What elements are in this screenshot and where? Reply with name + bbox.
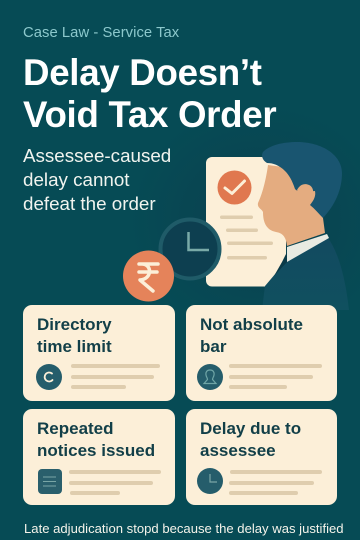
card: not absolute bar <box>186 305 337 401</box>
card heading: assessee <box>200 440 276 460</box>
card heading: Directory <box>37 315 112 334</box>
icon: rupee coin <box>123 250 174 302</box>
subtitle: delay cannot <box>23 169 130 190</box>
card heading <box>37 419 155 460</box>
icon: check badge <box>218 170 252 204</box>
icon: person badge <box>197 364 223 390</box>
card heading: Repeated <box>37 419 114 438</box>
card heading: Not absolute <box>200 315 303 334</box>
card: delay due to assessee <box>186 409 337 505</box>
text placeholder lines <box>69 470 161 495</box>
person <box>258 142 349 310</box>
card heading: bar <box>200 336 226 356</box>
card heading <box>37 315 112 356</box>
card heading: time limit <box>37 336 112 356</box>
card: repeated notices issued <box>23 409 175 505</box>
subtitle: defeat the order <box>23 193 156 214</box>
card: directory time limit <box>23 305 175 401</box>
eyebrow: case law label: Case Law - Service Tax <box>23 25 179 41</box>
subtitle: Assessee-caused <box>23 145 171 166</box>
text placeholder lines <box>229 470 322 495</box>
icon: clock <box>160 220 220 278</box>
title: Delay Doesn’t <box>23 52 262 93</box>
card heading <box>200 315 303 356</box>
icon: clock badge <box>197 468 223 494</box>
card heading <box>200 419 301 460</box>
text placeholder lines <box>71 364 160 389</box>
document <box>206 157 286 286</box>
footer text: Late adjudication stopd because the delay was justified <box>24 521 344 536</box>
illustration: document, person, clock and rupee coin <box>123 142 349 310</box>
icon: crescent badge <box>36 364 62 390</box>
icon: notice document <box>38 469 62 494</box>
subtitle <box>23 145 171 214</box>
card heading: Delay due to <box>200 419 301 438</box>
title <box>23 52 276 135</box>
card heading: notices issued <box>37 440 155 460</box>
title: Void Tax Order <box>23 94 276 135</box>
text placeholder lines <box>229 364 322 389</box>
